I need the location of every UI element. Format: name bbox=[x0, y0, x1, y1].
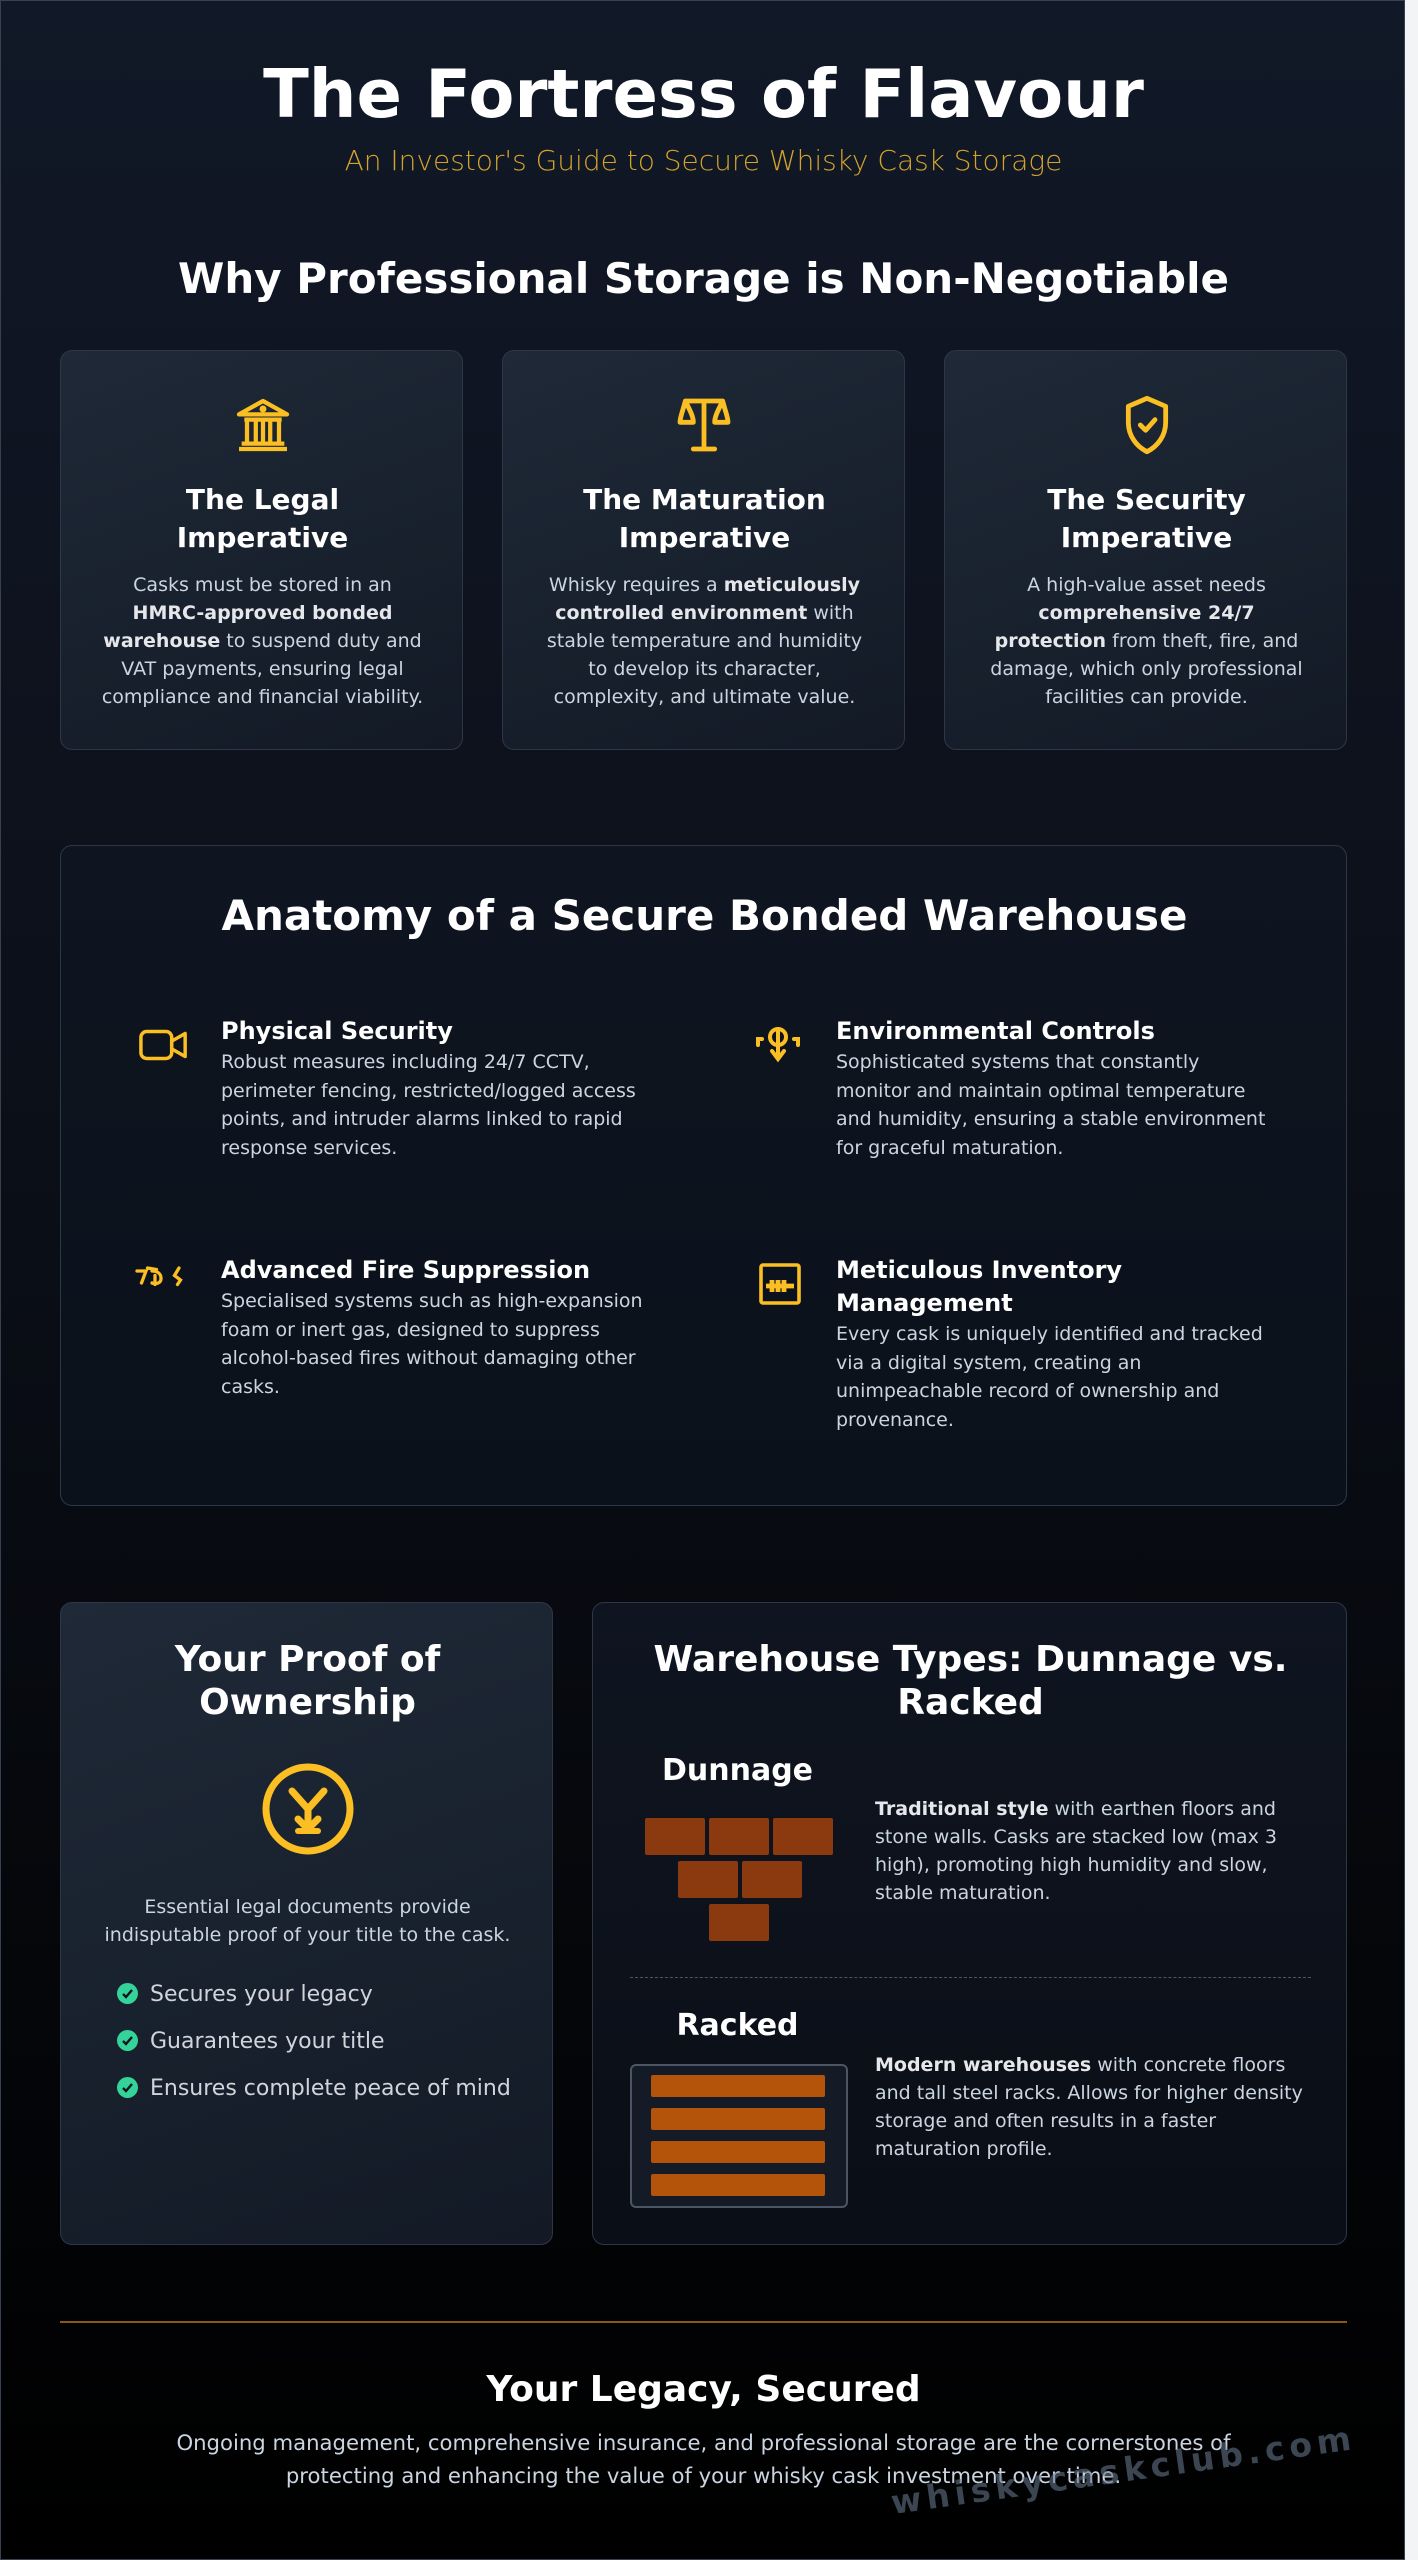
card title bbox=[177, 483, 348, 554]
footer text bbox=[176, 2430, 1231, 2488]
footer text: Ongoing management, comprehensive insurance, and professional storage are the cornerstones of bbox=[176, 2430, 1231, 2455]
card text: Whisky requires a meticulously controlled environment with stable temperature and humidity to develop its character, complexity, and ultimate value. bbox=[547, 574, 862, 708]
item: fire suppression: Advanced Fire Suppression bbox=[221, 1256, 590, 1284]
checklist: Secures your legacy bbox=[150, 1982, 373, 2007]
item: inventory management bbox=[759, 1256, 1263, 1430]
item: inventory management: Meticulous Inventory bbox=[836, 1256, 1122, 1284]
item: environmental controls: Sophisticated systems that constantly monitor and maintain optimal temperature and humidity, ensuring a stable environment for graceful maturation. bbox=[836, 1051, 1265, 1158]
panel heading: Your Proof of bbox=[175, 1639, 440, 1680]
icon: fire extinguisher spray bbox=[135, 1266, 183, 1286]
item: fire suppression: Specialised systems such as high-expansion foam or inert gas, designed to suppress alcohol-based fires without damaging other casks. bbox=[221, 1290, 643, 1398]
card title bbox=[1047, 483, 1246, 554]
footer text: protecting and enhancing the value of your whisky cask investment over time. bbox=[286, 2463, 1121, 2488]
panel: legal imperative bbox=[60, 350, 463, 750]
text: dunnage: Traditional style with earthen floors and stone walls. Casks are stacked low (max 3 high), promoting high humidity and slow, stable maturation. bbox=[875, 1798, 1277, 1904]
icon: video camera bbox=[139, 1030, 187, 1060]
item: inventory management: Every cask is uniquely identified and tracked via a digital system, creating an unimpeachable record of ownership and provenance. bbox=[836, 1323, 1263, 1430]
card text: Casks must be stored in an HMRC-approved bonded warehouse to suspend duty and VAT payments, ensuring legal compliance and financial viability. bbox=[102, 574, 423, 708]
panel: maturation imperative bbox=[502, 350, 905, 750]
watermark: whiskycaskclub.com bbox=[888, 2418, 1358, 2522]
panel: proof of ownership bbox=[60, 1602, 553, 2245]
section heading: why professional storage: Why Professional Storage is Non-Negotiable bbox=[178, 254, 1229, 303]
icon: racked shelves bbox=[630, 2064, 848, 2208]
card title: Imperative bbox=[1061, 521, 1232, 554]
icon: bank building bbox=[236, 398, 290, 452]
panel heading bbox=[174, 1639, 441, 1723]
panel: anatomy of warehouse bbox=[60, 845, 1347, 1506]
panel heading bbox=[654, 1639, 1287, 1723]
card title: Imperative bbox=[619, 521, 790, 554]
panel: warehouse types bbox=[592, 1602, 1347, 2245]
card title: The Maturation bbox=[583, 483, 826, 516]
text: indisputable proof of your title to the cask. bbox=[105, 1924, 510, 1946]
card title bbox=[583, 483, 826, 554]
checklist: Ensures complete peace of mind bbox=[150, 2076, 511, 2101]
item: physical security: Robust measures including 24/7 CCTV, perimeter fencing, restricted/logged access points, and intruder alarms linked to rapid response services. bbox=[221, 1051, 636, 1158]
panel: security imperative bbox=[944, 350, 1347, 750]
item: fire suppression bbox=[135, 1256, 643, 1398]
icon: thermometer bbox=[756, 1027, 800, 1062]
icon: ownership seal bbox=[262, 1764, 354, 1854]
subheading: racked: Racked bbox=[676, 2008, 799, 2043]
item: physical security: Physical Security bbox=[221, 1017, 453, 1045]
checklist: Guarantees your title bbox=[150, 2029, 385, 2054]
footer heading: Your Legacy, Secured bbox=[486, 2369, 921, 2410]
card text: A high-value asset needs comprehensive 24/7 protection from theft, fire, and damage, which only professional facilities can provide. bbox=[990, 574, 1303, 708]
item: physical security bbox=[139, 1017, 636, 1158]
subheading: dunnage: Dunnage bbox=[662, 1753, 813, 1788]
icon: dunnage stack bbox=[645, 1818, 833, 1941]
title: The Fortress of Flavour bbox=[263, 55, 1144, 133]
icon: shield check bbox=[1126, 396, 1168, 454]
panel heading: Anatomy of a Secure Bonded Warehouse bbox=[221, 891, 1188, 940]
icon: inventory ledger bbox=[759, 1263, 801, 1305]
text bbox=[105, 1896, 510, 1946]
item: environmental controls: Environmental Controls bbox=[836, 1017, 1155, 1045]
panel heading: Warehouse Types: Dunnage vs. bbox=[654, 1639, 1287, 1680]
card title: Imperative bbox=[177, 521, 348, 554]
text: racked: Modern warehouses with concrete floors and tall steel racks. Allows for higher density storage and often results in a faster maturation profile. bbox=[875, 2054, 1303, 2160]
icon: scales bbox=[678, 398, 730, 452]
card title: The Security bbox=[1047, 483, 1246, 516]
card title: The Legal bbox=[186, 483, 339, 516]
checklist bbox=[117, 1982, 511, 2101]
panel heading: Ownership bbox=[199, 1682, 416, 1723]
text: Essential legal documents provide bbox=[144, 1896, 471, 1918]
subtitle: An Investor's Guide to Secure Whisky Cask Storage bbox=[345, 144, 1062, 177]
item: environmental controls bbox=[756, 1017, 1265, 1158]
panel heading: Racked bbox=[897, 1682, 1044, 1723]
item: inventory management: Management bbox=[836, 1289, 1013, 1317]
